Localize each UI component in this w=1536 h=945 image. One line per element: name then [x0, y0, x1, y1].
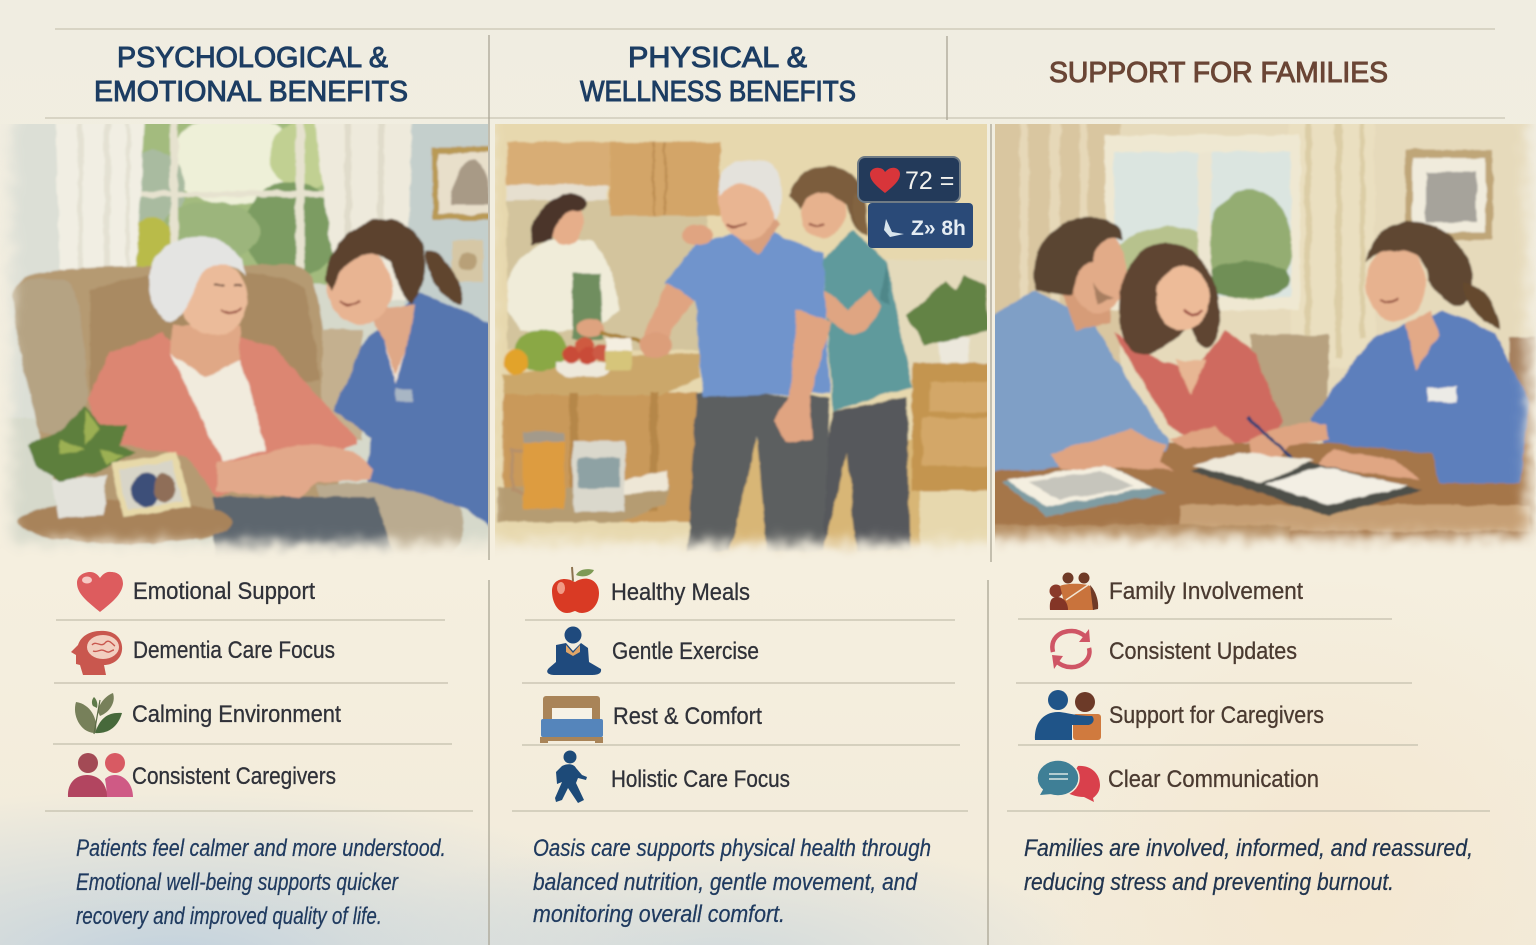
label: Consistent Caregivers: Consistent Caregivers [132, 763, 336, 790]
heading: physical and wellness benefits [580, 42, 856, 108]
benefit list: families [1035, 572, 1324, 802]
summary text: psychological: Emotional well-being supports quicker [76, 869, 399, 896]
icon: speech bubbles [1037, 760, 1100, 802]
heading: psychological and emotional benefits [94, 42, 408, 108]
icon: heart [77, 572, 123, 612]
label: Calming Environment: Calming Environment [132, 701, 341, 728]
wall pictures [432, 147, 494, 282]
icon: family group [1050, 572, 1098, 610]
panel: support for families [990, 57, 1536, 896]
dresser and plant [906, 275, 992, 491]
label: Consistent Updates: Consistent Updates [1109, 638, 1297, 665]
illustration: caregiver helping a man walk in a kitchen [490, 118, 992, 564]
woman in coral sweater [1114, 243, 1283, 450]
icon: head with brain [71, 631, 122, 675]
benefit list: psychological [68, 572, 341, 797]
nurse in teal scrubs [790, 166, 912, 552]
heading: psychological and emotional benefits: PSYCHOLOGICAL & [117, 42, 388, 74]
calendar notebook [1002, 465, 1166, 517]
caregiver in blue shirt [326, 219, 495, 530]
clasped hands [217, 444, 373, 498]
framed picture [1405, 150, 1493, 240]
illustration: caregiver holding an elderly woman's hands [0, 115, 495, 564]
summary text: physical: Oasis care supports physical health through [533, 835, 931, 862]
summary text: families: reducing stress and preventing burnout. [1024, 869, 1394, 896]
window [1105, 135, 1300, 310]
health monitor badges [858, 157, 973, 248]
panel: physical and wellness benefits [490, 42, 992, 928]
curtains [55, 118, 145, 270]
potted plant [27, 405, 135, 518]
wooden table [995, 441, 1536, 548]
elderly woman in coral cardigan [88, 236, 395, 560]
caregiver with pen [1248, 222, 1530, 483]
label: Holistic Care Focus: Holistic Care Focus [611, 766, 790, 793]
kitchen counter with food [502, 329, 700, 522]
label: Healthy Meals: Healthy Meals [611, 579, 750, 606]
label: Support for Caregivers: Support for Caregivers [1109, 702, 1324, 729]
label: Dementia Care Focus: Dementia Care Focus [133, 637, 335, 664]
icon: seated exercise figure [547, 626, 601, 675]
label: Emotional Support: Emotional Support [133, 578, 315, 605]
summary text: physical [533, 835, 931, 928]
background chair [1250, 335, 1328, 440]
summary text: psychological [76, 835, 446, 930]
summary text: psychological: recovery and improved quality of life. [76, 903, 382, 930]
badge: sleep hours: Z» 8h [911, 217, 966, 240]
summary text: families [1024, 835, 1473, 896]
label: Gentle Exercise: Gentle Exercise [612, 638, 759, 665]
armchair [12, 264, 464, 555]
summary text: physical: balanced nutrition, gentle movement, and [533, 869, 918, 896]
heading: physical and wellness benefits: WELLNESS BENEFITS [580, 76, 856, 108]
icon: circular update arrows [1052, 629, 1090, 669]
summary text: physical: monitoring overall comfort. [533, 901, 785, 928]
icon: bed [540, 696, 603, 743]
open notebook [1189, 453, 1422, 516]
label: Clear Communication: Clear Communication [1108, 766, 1319, 793]
icon: supporting people [1035, 690, 1101, 740]
icon: apple [552, 567, 599, 613]
icon: two people [68, 753, 133, 797]
window with garden view [134, 124, 334, 286]
cook preparing food [507, 194, 640, 341]
heading: physical and wellness benefits: PHYSICAL & [628, 42, 807, 74]
icon: leaves [75, 693, 122, 734]
framed family photo [110, 453, 190, 517]
heading: psychological and emotional benefits: EMOTIONAL BENEFITS [94, 76, 408, 108]
benefit list: physical [540, 567, 790, 803]
wall cabinets [507, 142, 720, 216]
icon: walking figure [555, 750, 587, 803]
illustration: caregiver meeting with a family [990, 118, 1536, 564]
summary text: families: Families are involved, informed, and reassured, [1024, 835, 1473, 862]
summary text: psychological: Patients feel calmer and more understood. [76, 835, 446, 862]
label: Family Involvement: Family Involvement [1109, 578, 1303, 605]
side table [17, 500, 233, 544]
panel: psychological and emotional benefits [0, 42, 495, 930]
badge: heart rate: 72 = [905, 167, 954, 195]
heading: support for families: SUPPORT FOR FAMILIES [1049, 57, 1388, 89]
label: Rest and Comfort: Rest & Comfort [613, 703, 762, 730]
pitcher, glass jug and side table [497, 432, 670, 522]
man in light blue shirt [990, 217, 1175, 472]
older man in blue polo [639, 160, 832, 552]
